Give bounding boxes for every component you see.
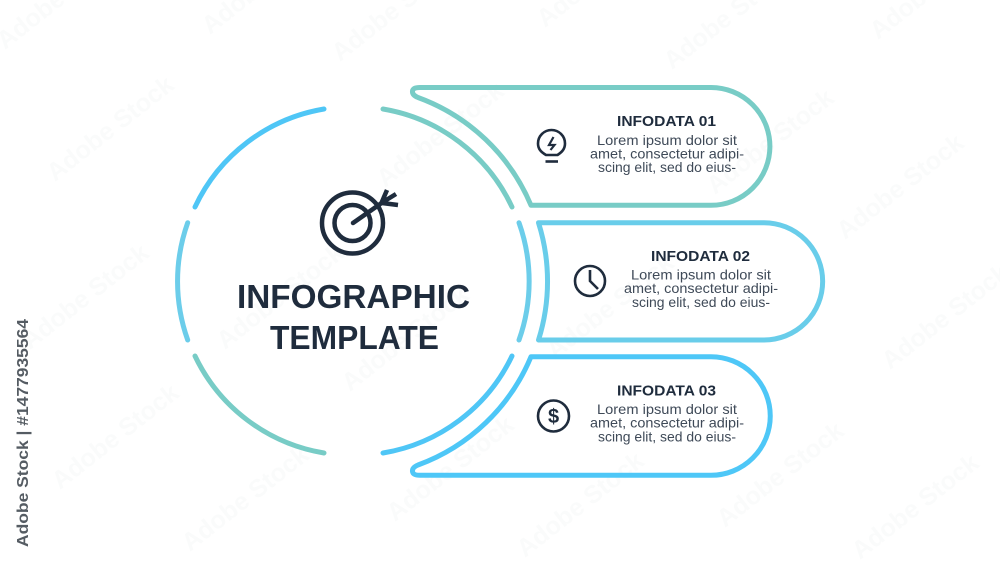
card outline 03: [412, 357, 770, 475]
body text 01: scing elit, sed do eius-: [598, 159, 736, 175]
text: Adobe Stock: [16, 239, 154, 355]
panel: infodata 03: [412, 357, 770, 475]
text: Adobe Stock: [541, 249, 679, 365]
arc: bottom left: [195, 356, 324, 453]
heading 02: INFODATA 02: [651, 248, 750, 265]
body text 01: Lorem ipsum dolor sit: [597, 132, 737, 148]
arc: top left: [195, 109, 324, 207]
icon: light bulb: [538, 130, 565, 162]
body text 03: Lorem ipsum dolor sit: [597, 401, 737, 417]
arc: left: [178, 223, 188, 340]
body text 01: [590, 132, 744, 175]
text: Adobe Stock: [511, 447, 649, 563]
text: Adobe Stock: [176, 441, 314, 557]
body text 02: Lorem ipsum dolor sit: [631, 266, 771, 282]
text: Adobe Stock: [831, 129, 969, 245]
card outline 01: [412, 88, 770, 205]
text: Adobe Stock: [211, 239, 349, 355]
panel: infodata 02: [538, 223, 823, 340]
text: Adobe Stock: [381, 411, 519, 527]
arc: right: [519, 223, 529, 340]
body text 03: amet, consectetur adipi-: [590, 414, 744, 430]
text: Adobe Stock: [336, 281, 474, 397]
body text 02: amet, consectetur adipi-: [624, 280, 778, 296]
central ring of six arcs: [178, 109, 529, 453]
text: Adobe Stock: [846, 449, 984, 563]
heading 01: INFODATA 01: [617, 113, 716, 130]
heading 03: INFODATA 03: [617, 383, 716, 400]
text: Adobe Stock: [701, 84, 839, 200]
title: [237, 278, 470, 356]
icon: clock: [575, 266, 605, 296]
body text 01: amet, consectetur adipi-: [590, 146, 744, 162]
icon: dollar coin: $: [548, 406, 559, 428]
body text 02: [624, 266, 778, 310]
body text 03: scing elit, sed do eius-: [598, 428, 736, 444]
title: INFOGRAPHIC: [237, 278, 470, 315]
stock credit: Adobe Stock | #1477935564: [15, 319, 32, 547]
text: Adobe Stock: [711, 417, 849, 533]
title: TEMPLATE: [270, 319, 439, 356]
card outline 02: [538, 223, 823, 340]
icon: target with arrow: [322, 190, 398, 254]
body text 02: scing elit, sed do eius-: [632, 294, 770, 310]
text: Adobe Stock: [371, 77, 509, 193]
text: Adobe Stock: [41, 71, 179, 187]
text: Adobe Stock: [46, 379, 184, 495]
arc: top right: [383, 109, 512, 207]
icon: dollar coin: [538, 400, 569, 432]
body text 03: [590, 401, 744, 444]
arc: bottom right: [383, 356, 512, 453]
panel: infodata 01: [412, 88, 770, 205]
